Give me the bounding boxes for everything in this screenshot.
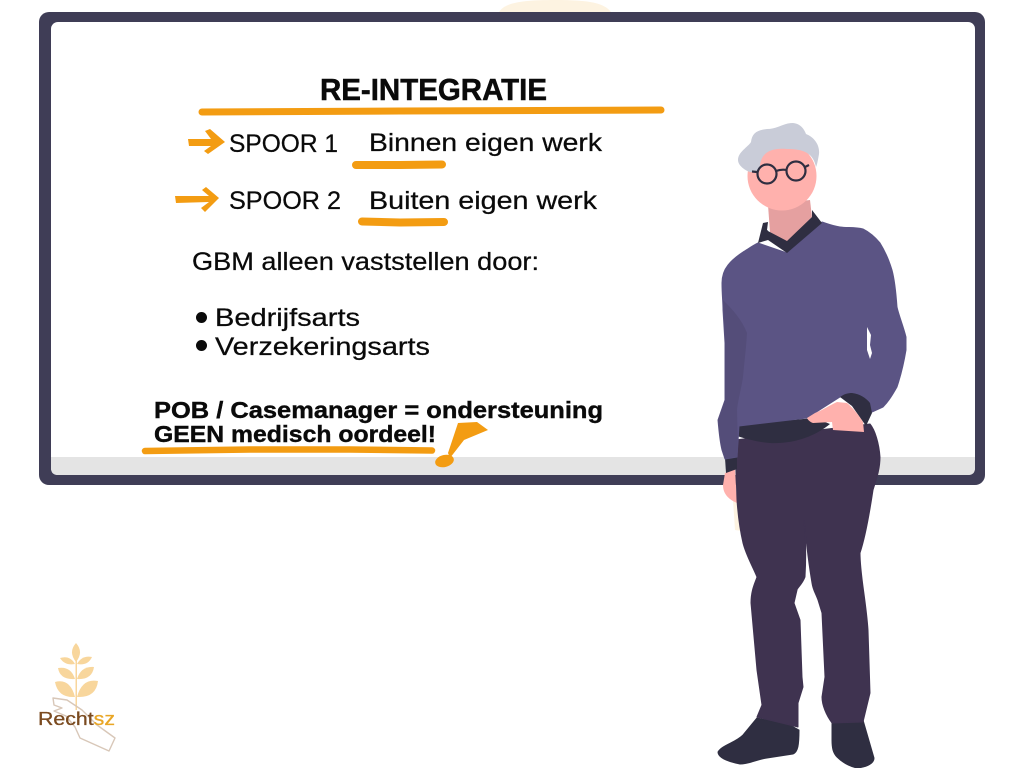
glasses [752,162,809,184]
panel: presentation board [39,12,985,485]
hand in pocket [807,402,864,432]
illustration: standing man [718,123,906,768]
shirt hem [732,418,830,443]
face [748,142,816,210]
GBM sentence: GBM alleen vaststellen door: [192,248,539,276]
spoor 1 label: SPOOR 1 [229,130,338,158]
bullet list: Bedrijfsarts [215,304,360,332]
callout text: POB / Casemanager = ondersteuning [154,397,603,423]
callout text: GEEN medisch oordeel! [154,421,436,447]
title: RE-INTEGRATIE [320,72,547,107]
spoor 2 label: SPOOR 2 [229,187,341,215]
icon: exclamation mark [434,422,488,469]
underline buiten [362,222,444,223]
brand name: Recht sz [38,709,115,729]
callout underline [145,450,432,451]
icon: arrow spoor 1 [188,129,225,154]
sweater [718,222,906,459]
left hand [723,469,737,503]
bullet list [196,304,430,361]
white collar gap [767,222,770,232]
underline binnen [356,160,442,169]
decorative peach circle behind board [499,0,611,12]
bullet list: Verzekeringsarts [215,333,430,361]
wheat [55,643,98,710]
hair [738,123,819,172]
spoor 1 description: Binnen eigen werk [369,129,603,157]
logo: Rechtsz [38,643,115,751]
trousers [735,424,880,727]
spoor 2 description: Buiten eigen werk [369,187,598,215]
collar [758,210,822,253]
title underline [202,110,661,112]
white gap at arm [867,327,872,359]
sweater shade left arm [718,300,747,459]
shoes [718,718,874,768]
cream shape behind hand [733,500,742,531]
hand outline [53,698,115,751]
callout text [154,397,603,447]
icon: arrow spoor 2 [175,187,219,212]
right cuff [840,393,872,426]
neck [768,200,812,242]
left cuff [725,456,737,473]
